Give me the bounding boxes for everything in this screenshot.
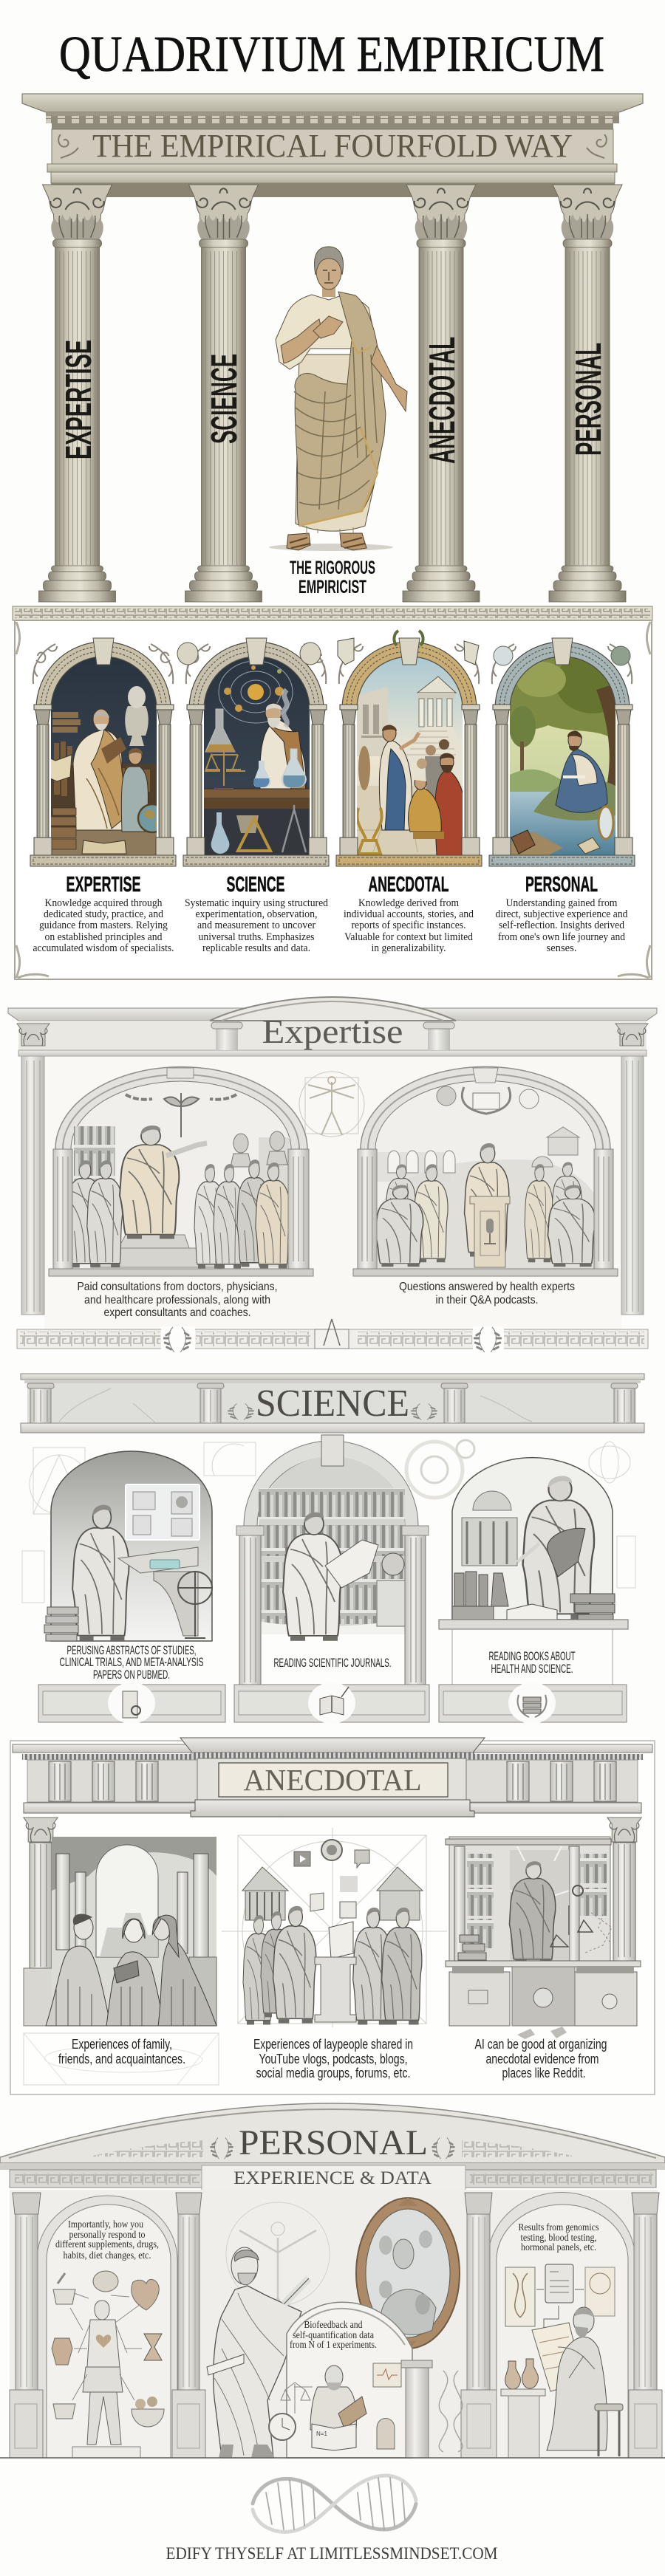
footer text: EDIFY THYSELF AT LIMITLESSMINDSET.COM: [166, 2544, 498, 2563]
heading: ANECDOTAL: [244, 1763, 421, 1797]
text: paid consultations: [77, 1281, 278, 1319]
card: science: [177, 638, 329, 866]
back wall: [10, 2190, 658, 2458]
text block: personal: PERSONAL: [525, 873, 598, 897]
text: laypeople: Experiences of laypeople shared in: [253, 2037, 413, 2052]
text: q&a podcasts: Questions answered by health experts: [399, 1281, 575, 1293]
text: supplements response: habits, diet changes, etc.: [64, 2250, 151, 2261]
text block: science: replicable results and data.: [202, 942, 310, 954]
text: paid consultations: Paid consultations from doctors, physicians,: [77, 1281, 278, 1293]
logo: dna infinity: [253, 2476, 416, 2532]
text: ai: places like Reddit.: [502, 2066, 585, 2080]
text block: anecdotal: Valuable for context but limited: [344, 931, 473, 943]
card: personal: [489, 638, 635, 866]
text block: science: SCIENCE: [226, 873, 285, 897]
figure caption: EMPIRICIST: [299, 577, 366, 597]
arch: journals: [236, 1435, 429, 1685]
entablature with pediment: [8, 997, 657, 1056]
text block: anecdotal: individual accounts, stories, and: [344, 908, 474, 920]
text block: personal: senses.: [547, 942, 576, 954]
pillar: science: [185, 185, 262, 602]
text block: expertise: on established principles and: [44, 931, 163, 943]
side columns: [24, 1818, 641, 2026]
text: supplements response: Importantly, how you: [68, 2219, 143, 2230]
bottom frieze with laurels and book: [17, 1319, 648, 1352]
subheading: EXPERIENCE & DATA: [233, 2168, 432, 2188]
text: journals: READING SCIENTIFIC JOURNALS.: [273, 1656, 392, 1670]
figure: the rigorous empiricist: [269, 247, 407, 551]
text: books: [489, 1649, 575, 1676]
heading: PERSONAL: [239, 2123, 428, 2162]
text: biofeedback: [290, 2320, 377, 2351]
text: paid consultations: expert consultants and coaches.: [103, 1306, 251, 1319]
text: supplements response: personally respond to: [69, 2230, 145, 2241]
text block: anecdotal: [344, 873, 474, 954]
base tablets with icons: [38, 1682, 627, 1724]
pillar: expertise: [38, 185, 115, 602]
text: supplements response: different supplements, drugs,: [55, 2239, 159, 2250]
text: q&a podcasts: in their Q&A podcasts.: [436, 1294, 538, 1306]
text block: expertise: EXPERTISE: [66, 873, 140, 897]
arch: paid consultations: [49, 1067, 313, 1276]
panel: four ways overview: [13, 606, 652, 979]
text block: science: Systematic inquiry using structured: [185, 897, 328, 909]
scene: ai scholar desk: [446, 1837, 641, 2039]
text block: expertise: dedicated study, practice, and: [44, 908, 163, 920]
text: paid consultations: and healthcare professionals, along with: [84, 1294, 270, 1306]
text: biofeedback: Biofeedback and: [304, 2320, 362, 2331]
text block: personal: direct, subjective experience and: [495, 908, 628, 920]
entablature: [22, 94, 643, 197]
text block: science: and measurement to uncover: [197, 919, 316, 931]
columns and arches: [10, 2192, 662, 2458]
text block: expertise: [33, 873, 174, 954]
text: laypeople: [253, 2037, 413, 2080]
scene: family and friends: [46, 1837, 216, 2026]
card: expertise: [30, 638, 176, 866]
panel: temple with four pillars: [22, 94, 643, 602]
pillar: personal: [549, 185, 626, 602]
text block: personal: Understanding gained from: [505, 897, 618, 909]
entablature: [13, 1738, 652, 1817]
text block: science: [185, 873, 328, 954]
text: books: HEALTH AND SCIENCE.: [491, 1662, 573, 1676]
text: genomics: Results from genomics: [519, 2222, 598, 2233]
text: family and friends: Experiences of family,: [72, 2037, 172, 2052]
header frieze: [21, 1374, 644, 1433]
text: abstracts: PAPERS ON PUBMED.: [93, 1668, 170, 1682]
text: books: READING BOOKS ABOUT: [489, 1649, 575, 1663]
inset: biofeedback arch: N=1: [316, 2431, 327, 2437]
pillar: expertise: EXPERTISE: [59, 340, 99, 459]
text: ai: AI can be good at organizing: [474, 2037, 607, 2052]
pillar: anecdotal: ANECDOTAL: [423, 337, 463, 464]
text: family and friends: friends, and acquaintances.: [58, 2052, 185, 2066]
panel: expertise: [8, 997, 657, 1352]
text block: personal: from one's own life journey and: [498, 931, 625, 943]
pillar: science: SCIENCE: [205, 354, 245, 444]
text: biofeedback: self-quantification data: [293, 2330, 375, 2341]
text block: science: universal truths. Emphasizes: [198, 931, 315, 943]
side pilasters: [21, 1056, 644, 1315]
inset: biofeedback arch: [269, 2302, 432, 2458]
text: abstracts: CLINICAL TRIALS, AND META-ANALYSIS: [59, 1655, 204, 1669]
text: laypeople: YouTube vlogs, podcasts, blogs,: [259, 2052, 408, 2066]
text block: anecdotal: Knowledge derived from: [358, 897, 459, 909]
frieze inscription: THE EMPIRICAL FOURFOLD WAY: [92, 128, 573, 164]
heading: SCIENCE: [256, 1383, 409, 1425]
text: genomics: testing, blood testing,: [520, 2233, 597, 2244]
pediment: [0, 2103, 665, 2190]
text: supplements response: [55, 2219, 159, 2261]
panel: anecdotal: [10, 1738, 655, 2094]
text: biofeedback: from N of 1 experiments.: [290, 2340, 377, 2351]
text: abstracts: PERUSING ABSTRACTS OF STUDIES,: [66, 1643, 197, 1657]
text: q&a podcasts: [399, 1281, 575, 1306]
text: abstracts: [59, 1643, 204, 1682]
text block: anecdotal: ANECDOTAL: [368, 873, 449, 897]
card: anecdotal: [336, 631, 482, 866]
text block: anecdotal: reports of specific instances.: [352, 919, 466, 931]
center wall: sage and mirror: [207, 2197, 460, 2458]
heading: Expertise: [262, 1013, 403, 1050]
text: ai: [474, 2037, 607, 2080]
niche: health books: [439, 1458, 628, 1685]
figure caption: THE RIGOROUS: [290, 558, 375, 578]
decorative diagram: vitruvian: [299, 1072, 364, 1137]
text block: science: experimentation, observation,: [195, 908, 318, 920]
text block: anecdotal: in generalizability.: [371, 942, 446, 954]
scene: laypeople online: [222, 1828, 447, 2027]
text block: personal: self-reflection. Insights derived: [499, 919, 624, 931]
panel: personal: [0, 2103, 665, 2458]
background geometry: [22, 1440, 635, 1603]
meander band: [13, 606, 652, 620]
text: genomics: [519, 2222, 598, 2253]
diagram: lab results and scribe: [501, 2264, 623, 2458]
text block: expertise: guidance from masters. Relying: [39, 919, 168, 931]
panel: science: [21, 1374, 644, 1724]
arch: q&a podcasts: [353, 1066, 618, 1276]
diagram: response cycle: [52, 2271, 164, 2458]
dna scribble on center wall: [439, 2371, 463, 2452]
text block: personal: [495, 873, 628, 954]
pillar: anecdotal: [403, 185, 480, 602]
figure caption: [290, 558, 375, 597]
niche: abstracts at desk: [44, 1451, 212, 1641]
text: genomics: hormonal panels, etc.: [521, 2242, 596, 2253]
text block: expertise: accumulated wisdom of specialists.: [33, 942, 174, 954]
pillar: personal: PERSONAL: [569, 343, 609, 456]
text: family and friends: [24, 2033, 219, 2085]
text: laypeople: social media groups, forums, etc.: [256, 2066, 411, 2080]
text block: expertise: Knowledge acquired through: [44, 897, 163, 909]
text: ai: anecdotal evidence from: [486, 2052, 598, 2066]
